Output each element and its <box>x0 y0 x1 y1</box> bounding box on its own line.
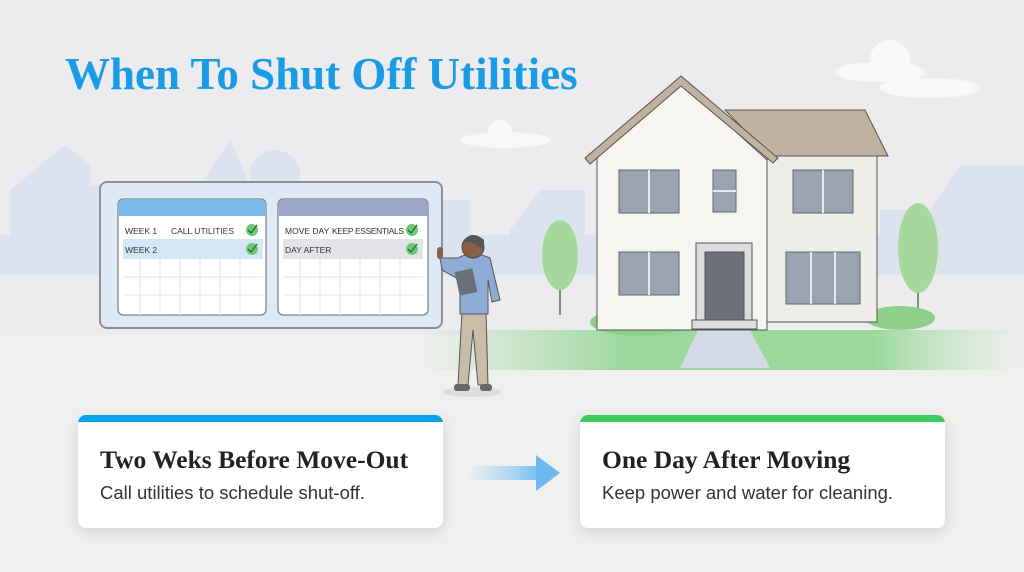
card: two weeks before <box>78 415 443 528</box>
left panel: CALL UTILITIES <box>171 226 234 236</box>
lawn <box>420 330 1024 370</box>
right panel <box>278 199 428 315</box>
card: two weeks before: Call utilities to schedule shut-off. <box>100 482 365 503</box>
card: one day after: One Day After Moving <box>602 445 850 474</box>
left panel: WEEK 2 <box>125 245 157 255</box>
right panel: DAY AFTER <box>285 245 331 255</box>
trees <box>542 220 578 315</box>
cloud <box>460 40 980 148</box>
left panel: WEEK 1 <box>125 226 157 236</box>
person <box>437 234 502 397</box>
title: When To Shut Off Utilities <box>65 49 578 99</box>
silhouettes <box>0 140 1024 275</box>
card: one day after <box>580 415 945 528</box>
right panel: KEEP ESSENTIALS <box>332 226 404 236</box>
card: two weeks before: Two Weks Before Move-Out <box>100 445 408 474</box>
arrow <box>474 455 560 491</box>
card: one day after: Keep power and water for cleaning. <box>602 482 893 503</box>
calendar board <box>99 181 443 329</box>
right panel: MOVE DAY <box>285 226 330 236</box>
left panel <box>118 199 266 315</box>
